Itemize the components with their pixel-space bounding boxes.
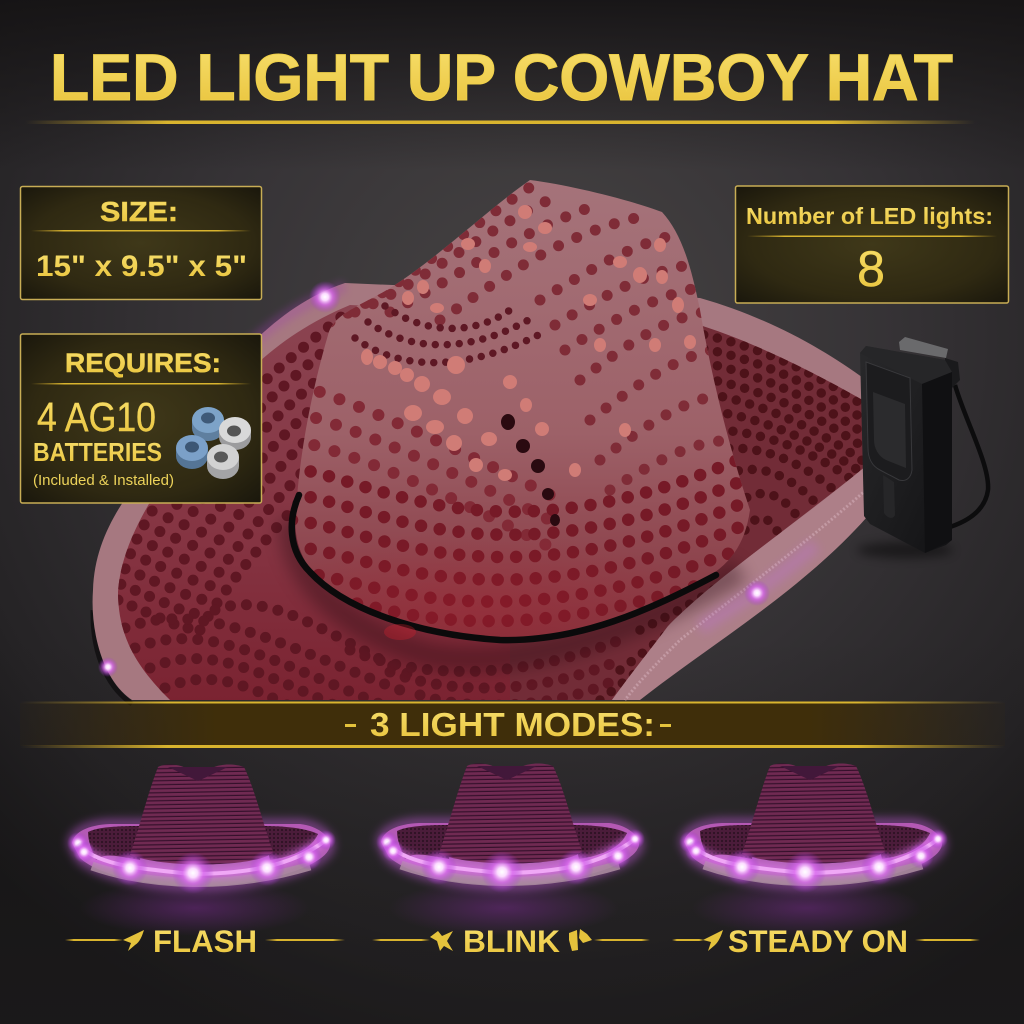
box body [860,346,952,553]
crown shadow on brim [292,520,740,659]
brim rim [93,283,866,700]
panel: number of LED lights [736,186,1008,303]
title: LED LIGHT UP COWBOY HAT [50,40,953,114]
switch cap [899,337,948,358]
black hat band [292,495,716,640]
bright reflective sequins [361,205,696,481]
battery box with wire [857,337,988,558]
heading: LED lights: Number of LED lights: [746,203,993,229]
included note: (Included & Installed) [33,472,174,489]
panel: size [20,186,262,300]
right front brim band [612,466,866,700]
size value: 15" x 9.5" x 5" [36,250,247,283]
main hat photo [93,180,880,730]
brim shadow edge [93,610,132,704]
mode: steady on [672,763,980,959]
mode: blink [372,763,650,959]
top face [860,346,952,384]
belt clip [866,362,912,481]
mini hat [679,763,948,893]
side face [922,372,952,553]
mini hat [67,764,336,894]
icon: left moth [430,931,453,951]
floor glow [389,880,619,936]
label: flash: FLASH [153,923,257,959]
rim tint near right LED [700,545,815,628]
icon: dart [703,930,723,951]
section band: light modes [20,702,1005,748]
wire [950,385,988,527]
panel: requires [20,334,262,503]
batteries label: BATTERIES [33,437,162,467]
icon: dart [123,930,144,951]
dark sequins [501,414,560,526]
box shadow [857,542,953,558]
heading: requires: REQUIRES: [65,348,221,378]
LED glow spots [309,281,341,313]
floor glow [80,880,310,936]
crown sequin rows [296,182,744,636]
LED count: 8 [857,241,885,297]
floor glow [692,880,922,936]
heading: 3 light modes: 3 LIGHT MODES: [370,706,655,743]
heading: size: SIZE: [100,196,178,227]
crown [295,180,750,641]
label: steady on: STEADY ON [728,923,908,959]
mini hat [376,763,645,893]
inner brim with sequins [118,305,863,700]
label: blink: BLINK [463,923,560,959]
icon: right moth [569,929,592,951]
icon: batteries [176,407,251,479]
red glow at band [384,624,416,640]
mode: flash [65,764,345,959]
battery count: 4 AG10 [37,394,156,440]
rim tint near top-left LED [225,286,345,372]
